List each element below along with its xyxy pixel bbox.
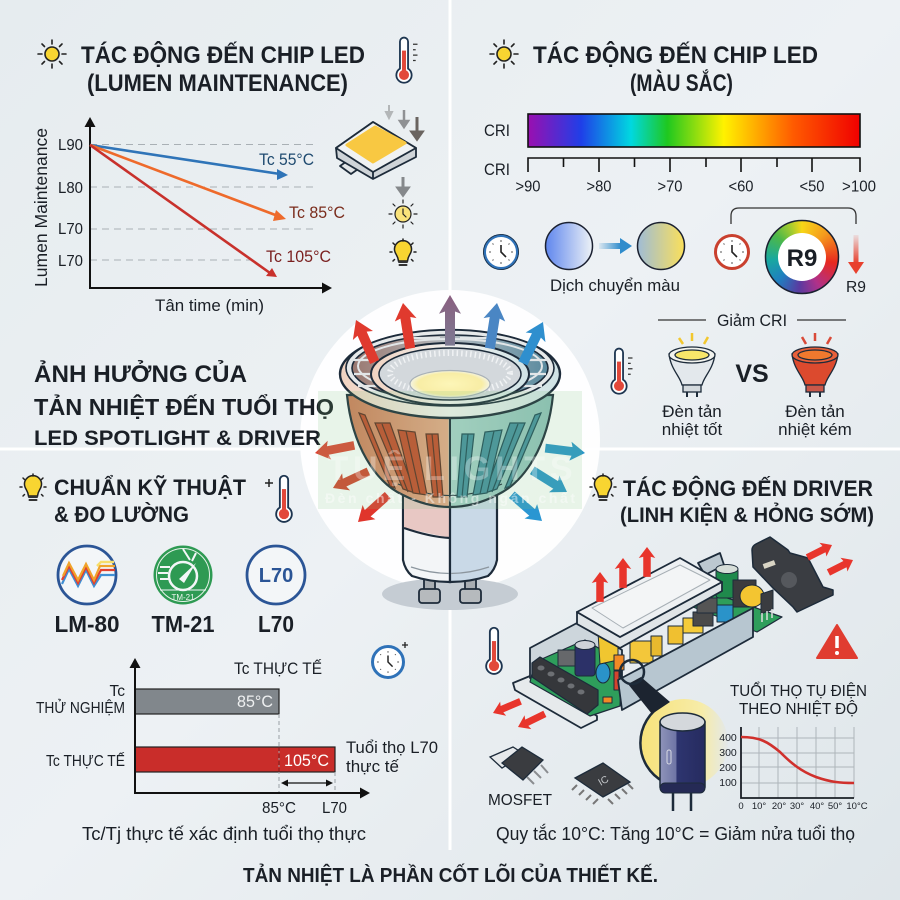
line chart: capacitor life: 300 — [719, 747, 737, 759]
icon: IC chip — [572, 763, 633, 804]
bar chart: Tc test vs actual: 105°C — [284, 752, 329, 770]
icon: MOSFET — [490, 747, 548, 784]
bulb rim and reflector — [340, 330, 560, 418]
icon: sun — [490, 40, 518, 68]
magnified capacitor — [620, 660, 728, 811]
bracket — [731, 208, 856, 224]
icon: warning — [817, 625, 857, 658]
line chart: capacitor life — [719, 727, 868, 812]
bar chart: Tc test vs actual: Tc THỰC TẾ — [46, 753, 125, 770]
heading: color: TÁC ĐỘNG ĐẾN CHIP LED — [533, 41, 818, 69]
lamp captions: Đèn tản — [662, 402, 722, 421]
heading: standards: CHUẨN KỸ THUẬT — [54, 475, 247, 500]
icon: thermometer plus — [265, 476, 292, 522]
line chart: capacitor life: 30° — [790, 801, 804, 812]
heading: driver: (LINH KIỆN & HỎNG SỚM) — [620, 503, 874, 527]
central spotlight bulb — [313, 295, 586, 610]
driver front wall — [618, 608, 753, 710]
central white circle — [300, 290, 600, 590]
line chart: lumen maintenance: L70 — [58, 221, 83, 238]
terminal block — [532, 657, 598, 714]
VS: VS — [735, 360, 769, 388]
driver cover — [577, 558, 722, 648]
badge: TM-21: TM-21 — [152, 611, 215, 637]
heading: color — [533, 41, 818, 97]
line chart: capacitor life: 100 — [719, 777, 737, 789]
bar chart: Tc test vs actual: thực tế — [346, 758, 399, 776]
bulb shadow — [382, 578, 518, 610]
main title: ẢNH HƯỞNG CỦA — [34, 359, 247, 388]
lamp captions: nhiệt kém — [778, 420, 852, 439]
line chart: lumen maintenance: Tc 105°C — [266, 248, 331, 266]
line chart: capacitor life: 50° — [828, 801, 842, 812]
icon: heat arrows on chip — [386, 105, 422, 195]
badge: LM-80: LM-80 — [54, 611, 120, 637]
icon: bulb — [390, 239, 416, 265]
heading: standards: & ĐO LƯỜNG — [54, 502, 189, 527]
bulb neck — [403, 490, 497, 582]
main title: LED SPOTLIGHT & DRIVER — [34, 426, 321, 450]
bar chart: Tc test vs actual: Tuổi thọ L70 — [346, 739, 438, 757]
line chart: lumen maintenance: L90 — [58, 137, 83, 154]
main title — [34, 359, 334, 450]
MOSFET label: MOSFET — [488, 792, 552, 809]
icon: poor lamp — [792, 333, 838, 397]
lamp captions — [662, 402, 852, 439]
line chart: capacitor life: 20° — [772, 801, 786, 812]
heading: lumen maintenance — [81, 41, 365, 97]
panel: standards and measurement — [20, 474, 438, 844]
caption: 10 degree rule: Quy tắc 10°C: Tăng 10°C = Giảm nửa tuổi thọ — [496, 823, 855, 844]
caption: Tc Tj: Tc/Tj thực tế xác định tuổi thọ thực — [82, 823, 366, 844]
reduced CRI label: Giảm CRI — [717, 312, 787, 330]
icon: thermometer — [611, 349, 632, 394]
panel: chip LED lumen maintenance — [31, 38, 422, 315]
line chart: lumen maintenance: L70 — [58, 253, 83, 270]
heading: lumen maintenance: (LUMEN MAINTENANCE) — [87, 70, 348, 97]
CRI scale: <60 — [728, 178, 754, 196]
R9 ring: R9 — [787, 245, 817, 272]
main title: TẢN NHIỆT ĐẾN TUỔI THỌ — [34, 392, 334, 420]
chart title: capacitor life: THEO NHIỆT ĐỘ — [739, 699, 858, 718]
line chart: capacitor life: 40° — [810, 801, 824, 812]
icon: bulb — [590, 474, 616, 500]
heading: standards — [54, 475, 247, 527]
footer: TẢN NHIỆT LÀ PHẦN CỐT LÕI CỦA THIẾT KẾ. — [243, 863, 658, 887]
line chart: lumen maintenance: Lumen Maintenance — [31, 128, 51, 287]
heading: color: (MÀU SẮC) — [630, 69, 733, 97]
bar chart: Tc test vs actual: 85°C — [262, 800, 296, 817]
CRI scale: CRI — [484, 160, 510, 179]
lamp captions: Đèn tản — [785, 402, 845, 421]
panel: driver — [486, 474, 874, 844]
line chart: capacitor life: 400 — [719, 732, 737, 744]
heading: lumen maintenance: TÁC ĐỘNG ĐẾN CHIP LED — [81, 41, 365, 69]
heading: driver — [620, 476, 874, 527]
badge: L70: L70 — [259, 565, 293, 587]
chart title: capacitor life — [730, 681, 867, 718]
icon: thermometer — [396, 38, 418, 83]
driver back walls and tray — [513, 553, 724, 728]
icon: good lamp — [669, 333, 715, 397]
CRI scale: <50 — [800, 178, 825, 196]
driver PCB — [530, 593, 782, 716]
watermark: TUỆ LIGHTS — [328, 450, 572, 488]
CRI scale — [484, 158, 876, 196]
heading: driver: TÁC ĐỘNG ĐẾN DRIVER — [623, 476, 873, 501]
icon: IC chip: IC — [597, 774, 611, 789]
bar chart: Tc test vs actual: THỬ NGHIỆM — [36, 699, 125, 717]
line chart: capacitor life: 10°C — [846, 801, 868, 812]
driver connector — [752, 537, 833, 612]
line chart: lumen maintenance: L80 — [58, 180, 83, 197]
badge: L70 — [247, 546, 305, 637]
lamp captions: nhiệt tốt — [662, 420, 723, 439]
line chart: lumen maintenance — [31, 117, 345, 315]
icon: sun — [38, 40, 66, 68]
icon: bulb — [20, 474, 46, 500]
heat arrows upward — [346, 295, 553, 368]
bar chart: Tc test vs actual: 85°C — [237, 693, 273, 711]
driver illustration — [490, 537, 856, 734]
icon: LED chip — [336, 122, 416, 179]
bar chart: Tc test vs actual: Tc — [110, 683, 125, 700]
watermark: Đèn chất - Không ngán chất — [325, 490, 575, 506]
CRI scale: >100 — [842, 178, 876, 196]
heat arrows sideways — [313, 436, 586, 529]
driver components — [558, 564, 773, 703]
icon: thermometer — [486, 628, 502, 674]
badge: TM-21 — [152, 546, 215, 637]
CRI scale: >80 — [586, 178, 612, 196]
line chart: lumen maintenance: Tân time (min) — [155, 296, 264, 315]
driver heat arrows — [490, 538, 856, 734]
R9 ring — [765, 220, 839, 294]
badge: LM-80 — [54, 546, 120, 637]
badge: L70: L70 — [258, 611, 294, 637]
line chart: capacitor life: 200 — [719, 762, 737, 774]
line chart: lumen maintenance: Tc 55°C — [259, 151, 314, 169]
line chart: capacitor life: 10° — [752, 801, 766, 812]
R9 down arrow — [846, 235, 866, 296]
line chart: lumen maintenance: Tc 85°C — [289, 204, 345, 222]
watermark — [318, 391, 582, 509]
panel: chip LED color — [484, 40, 876, 439]
bar chart: Tc test vs actual — [36, 658, 438, 817]
bulb pins — [419, 579, 481, 603]
icon: clock plus — [372, 642, 408, 678]
CRI scale: >70 — [658, 178, 683, 196]
spectrum bar — [484, 114, 860, 147]
line chart: capacitor life: 0 — [738, 801, 744, 812]
R9 down arrow: R9 — [846, 279, 866, 296]
color shift: Dịch chuyển màu — [550, 276, 680, 295]
bar chart: Tc test vs actual: L70 — [322, 800, 347, 817]
icon: clock sun — [389, 200, 417, 228]
spectrum bar: CRI — [484, 121, 510, 140]
bulb heat sink — [347, 395, 553, 582]
icon: blue clock — [484, 234, 518, 270]
chart title: capacitor life: TUỔI THỌ TỤ ĐIỆN — [730, 681, 867, 700]
badge: TM-21: TM-21 — [171, 593, 195, 602]
icon: red clock — [716, 236, 748, 268]
CRI scale: >90 — [516, 178, 541, 196]
bar chart: Tc test vs actual: Tc THỰC TẾ — [234, 659, 322, 678]
color shift — [546, 222, 684, 295]
